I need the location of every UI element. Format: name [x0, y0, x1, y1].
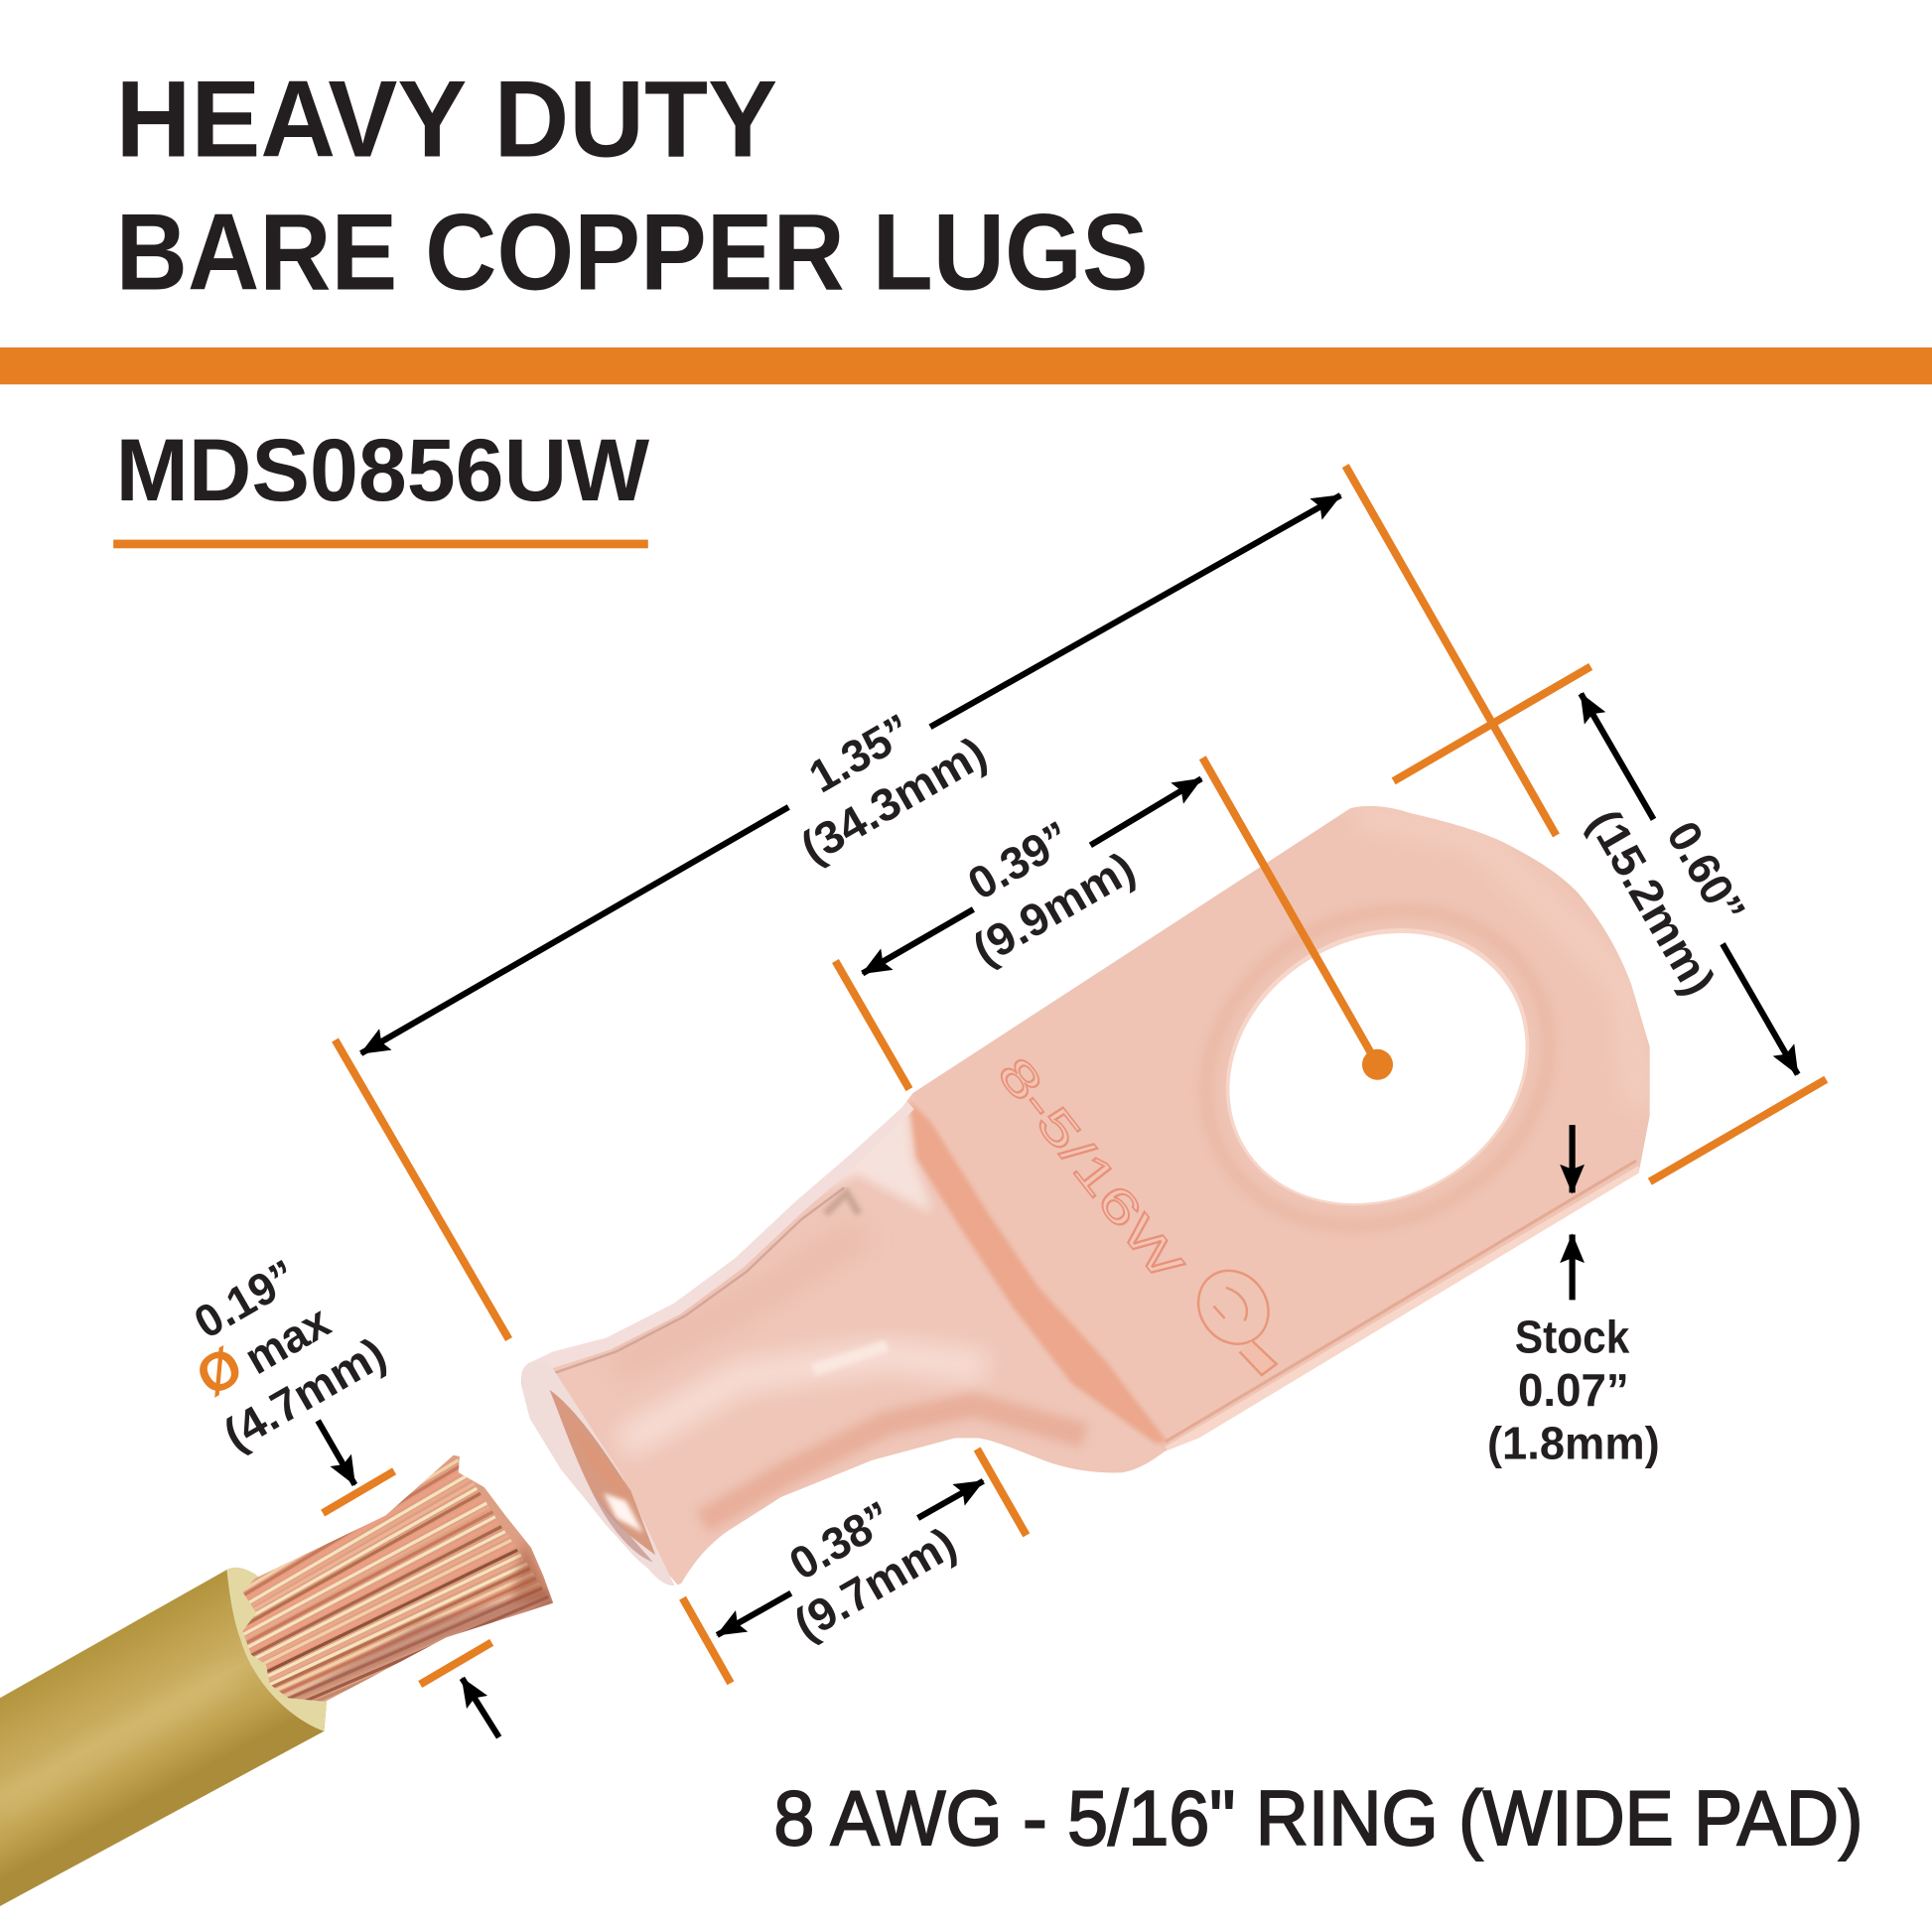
dimension: hole offset 0.39 — [835, 758, 1393, 1089]
orange band — [0, 347, 1932, 384]
part number: MDS0856UW — [116, 420, 650, 519]
lug pad shading — [1374, 814, 1640, 1090]
dimension: max wire diameter: Ø — [186, 1334, 253, 1408]
dimension: hole offset 0.39: (9.9mm) — [964, 842, 1144, 975]
dimension: barrel length 0.38 — [683, 1449, 1027, 1683]
title: HEAVY DUTY — [116, 60, 777, 181]
dimension: stock thickness: 0.07” — [1518, 1364, 1629, 1416]
lug barrel — [511, 1093, 1165, 1589]
fold crease — [909, 1100, 1169, 1443]
dimension: stock thickness: (1.8mm) — [1487, 1417, 1660, 1468]
lug mouth rim — [521, 1361, 675, 1587]
dimension: stock thickness — [1487, 1125, 1660, 1468]
dimension: barrel length 0.38: 0.38” — [780, 1491, 900, 1589]
title — [116, 60, 1149, 314]
dimension: barrel length 0.38: (9.7mm) — [785, 1517, 965, 1650]
grey smudge — [826, 1192, 859, 1213]
mounting hole — [1175, 874, 1580, 1260]
dimension: pad width 0.60: (15.2mm) — [1579, 800, 1725, 1004]
dimension: stock thickness: Stock — [1515, 1311, 1630, 1363]
lug body — [505, 788, 1663, 1589]
dimension: max wire diameter — [186, 1249, 499, 1737]
stamped marking: 8-5/16W — [988, 1046, 1194, 1291]
dimension: overall length 1.35: (34.3mm) — [792, 727, 995, 874]
wire insulation — [0, 1567, 327, 1906]
hole bevel shading — [1149, 850, 1606, 1287]
copper lug — [505, 788, 1663, 1589]
dimension: max wire diameter: (4.7mm) — [214, 1327, 394, 1460]
dimension: pad width 0.60: 0.60” — [1657, 812, 1756, 932]
barrel top edge — [530, 1100, 905, 1363]
dimension: pad width 0.60 — [1394, 666, 1826, 1181]
dimension: overall length 1.35: 1.35” — [800, 704, 920, 802]
dimension: max wire diameter: 0.19” — [186, 1249, 305, 1348]
lug mouth interior — [550, 1390, 655, 1555]
copper strands — [242, 1455, 554, 1702]
product size caption: 8 AWG - 5/16" RING (WIDE PAD) — [773, 1774, 1863, 1862]
dimension: max wire diameter: max — [236, 1295, 339, 1384]
title: BARE COPPER LUGS — [116, 193, 1149, 314]
dimension: hole offset 0.39: 0.39” — [959, 811, 1079, 909]
stamped marking — [988, 1046, 1283, 1375]
dimension: overall length 1.35 — [336, 466, 1556, 1339]
wire — [0, 1448, 561, 1922]
